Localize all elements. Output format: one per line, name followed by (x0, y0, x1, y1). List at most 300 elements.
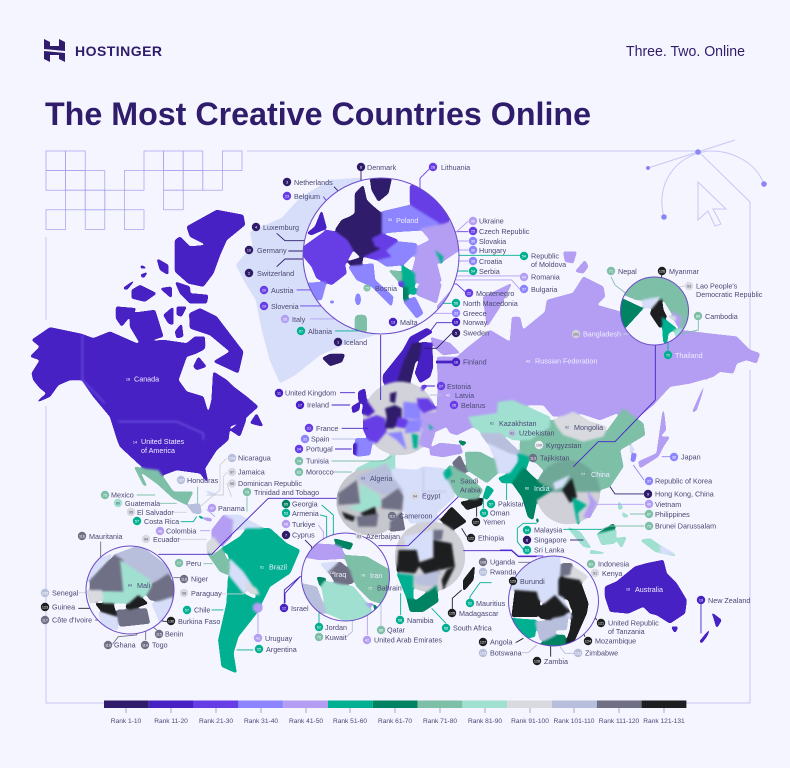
label: Jordan: Jordan (325, 623, 347, 632)
label: Ecuador (142, 535, 180, 544)
label: Malaysia: 64 (525, 528, 529, 532)
label: Germany (245, 246, 287, 255)
label: Tunisia (295, 456, 329, 466)
label: Angola (479, 638, 512, 646)
label: Nepal (607, 267, 637, 276)
label: New Zealand: 19 (699, 598, 703, 602)
label: Canada: Canada (134, 374, 159, 384)
label: Egypt: 94 (413, 494, 417, 498)
label: Croatia: 38 (471, 259, 475, 263)
label: Philippines: Philippines (655, 510, 690, 519)
label: Portugal (295, 444, 333, 454)
label: Benin (155, 630, 183, 638)
label: Zambia: Zambia (544, 657, 568, 666)
label: Belarus (450, 401, 486, 410)
label: Togo (141, 640, 168, 650)
label: Singapore: 8 (526, 538, 528, 542)
label: Brazil: 51 (260, 565, 264, 569)
label: France: 21 (307, 426, 311, 430)
label: South Africa: South Africa (453, 624, 492, 632)
label: Luxemburg: 4 (255, 225, 257, 229)
label: Bangladesh: Bangladesh (583, 330, 621, 338)
label: Republic of Korea: Republic of Korea (655, 476, 712, 486)
label: Estonia: 27 (439, 384, 443, 388)
label: Mauritania: Mauritania (89, 532, 123, 541)
label: Honduras: 107 (178, 478, 184, 482)
label: Qatar: Qatar (387, 626, 406, 634)
inset circle: Europe (300, 178, 460, 334)
legend: Rank 31-40 (244, 718, 278, 725)
legend: Rank 21-30 (199, 718, 233, 725)
label: Lao People's Democratic Republic (685, 282, 763, 299)
label: China: 77 (581, 472, 585, 476)
label: Norway: Norway (463, 318, 488, 327)
leader lines (78, 168, 701, 657)
label: Iceland (334, 338, 367, 347)
legend: Rank 81-90 (468, 718, 502, 725)
label: Republic of Moldova: Republic (531, 252, 559, 260)
label: Argentina: 55 (257, 647, 261, 651)
label: Bosnia: 75 (365, 286, 369, 290)
label: Chile: Chile (194, 606, 210, 614)
label: Sweden (452, 328, 489, 338)
label: Sri Lanka: Sri Lanka (534, 546, 564, 554)
label: Jamaica: Jamaica (238, 468, 265, 476)
label: Bulgaria: 37 (522, 287, 526, 291)
label: Cameroon: 112 (389, 514, 395, 518)
label: Greece: 33 (454, 311, 458, 315)
label: Iceland: Iceland (344, 338, 367, 347)
label: Egypt (411, 492, 440, 500)
label: Denmark: 6 (360, 165, 362, 169)
label: Croatia: Croatia (479, 257, 502, 266)
label: Iceland: 1 (337, 340, 339, 344)
label: Kyrgyzstan: 100 (536, 443, 542, 447)
label: Qatar: 88 (379, 628, 383, 632)
label: Uganda: Uganda (490, 558, 515, 566)
label: Lithuania (429, 163, 470, 172)
label: Kuwait: Kuwait (325, 633, 347, 642)
label: South Africa: 58 (444, 626, 448, 630)
label: Zambia: 128 (534, 659, 540, 663)
label: Pakistan: Pakistan (498, 500, 526, 508)
label: Greece (452, 309, 487, 318)
label: United Arab Emirates: United Arab Emirates (374, 636, 442, 644)
label: China (581, 470, 610, 479)
label: Kuwait: 76 (317, 635, 321, 639)
label: Mali: Mali (137, 581, 151, 590)
label: Nepal: Nepal (618, 267, 637, 276)
label: Malaysia: Malaysia (534, 526, 562, 534)
label: Peru (175, 559, 201, 568)
legend: Rank 111-120 (599, 718, 640, 725)
map: Europe mainland (352, 382, 447, 455)
label: Hungary: Hungary (479, 246, 507, 255)
label: Sweden: Sweden (463, 328, 489, 338)
label: Turkiye (282, 520, 315, 529)
label: Finland: Finland (463, 358, 487, 366)
label: Mali (128, 581, 151, 590)
map: Greenland (236, 178, 400, 383)
label: Ecuador: Ecuador (153, 535, 180, 544)
label: Lao People's Democratic Republic: Democratic Republic (696, 290, 763, 299)
label: Slovakia: 36 (471, 239, 475, 243)
legend: Rank 71-80 (423, 718, 457, 725)
label: United Republic of Tanzania (597, 618, 659, 636)
label: Trinidad and Tobago: Trinidad and Tobago (254, 488, 319, 497)
map: Central Asia, Middle East and India (430, 400, 600, 530)
label: Austria: Austria (271, 286, 293, 295)
label: Argentina: Argentina (266, 645, 297, 654)
title: The Most Creative Countries Online (45, 96, 591, 132)
label: Guatemala: 80 (116, 501, 120, 505)
label: Republic of Moldova (520, 252, 566, 269)
label: Luxemburg: Luxemburg (263, 223, 299, 232)
label: Montenegro: 22 (467, 291, 471, 295)
label: Niger: Niger (191, 574, 209, 584)
label: Singapore: Singapore (534, 536, 567, 544)
label: Sweden: 5 (455, 331, 457, 335)
label: Italy (281, 315, 306, 324)
label: Burkina Faso: 130 (168, 619, 174, 623)
label: Canada: 18 (126, 377, 130, 381)
label: Ghana: 119 (105, 643, 111, 647)
label: Colombia: Colombia (166, 526, 196, 536)
logo: Hostinger: HOSTINGER (75, 43, 162, 59)
label: Bahrain: Bahrain (377, 584, 402, 592)
label: Jordan (315, 623, 347, 632)
label: Tunisia: Tunisia (306, 456, 329, 466)
label: United Kingdom: 11 (277, 391, 281, 395)
label: Lithuania: 28 (431, 165, 435, 169)
label: Poland: 34 (388, 218, 392, 222)
label: Belgium: Belgium (294, 192, 320, 201)
map: Africa (337, 438, 475, 612)
label: United Republic of Tanzania: of Tanzania (608, 627, 645, 636)
inset circle: Middle East (300, 533, 390, 623)
label: Madagascar: Madagascar (459, 609, 499, 618)
label: Saudi Arabia: Arabia (460, 486, 481, 494)
label: Philippines: 87 (647, 512, 651, 516)
label: Bahrain: 72 (368, 586, 372, 590)
label: Azerbaijan: Azerbaijan (366, 532, 400, 541)
label: Tajikistan: Tajikistan (540, 454, 570, 462)
label: Poland: Poland (396, 216, 418, 225)
label: Costa Rica: 57 (135, 519, 139, 523)
label: Latvia (444, 391, 474, 400)
label: Spain (301, 434, 329, 444)
label: Saudi Arabia (451, 476, 481, 494)
label: Brazil (260, 562, 287, 572)
label: Honduras: Honduras (187, 476, 219, 485)
map: Indonesia, Australia, New Zealand (567, 500, 722, 643)
label: Italy: Italy (292, 315, 306, 324)
label: Iran: Iran (370, 571, 382, 580)
label: Austria: 20 (262, 288, 266, 292)
label: Yemen: Yemen (483, 518, 505, 526)
label: Israel: Israel (291, 604, 309, 613)
label: Portugal: 24 (297, 447, 301, 451)
label: Myanmar: 126 (659, 269, 665, 273)
label: Australia: 16 (626, 587, 630, 591)
label: Hungary: 39 (471, 248, 475, 252)
label: Guinea: 123 (42, 605, 48, 609)
label: France (305, 424, 338, 433)
label: Spain: 32 (303, 437, 307, 441)
label: Belgium (283, 192, 320, 201)
label: Bulgaria (520, 285, 557, 294)
label: Australia: Australia (635, 585, 663, 594)
label: Morocco: 83 (297, 470, 301, 474)
label: Mexico: 75 (103, 493, 107, 497)
label: United States of America: of America (141, 446, 175, 455)
label: Mozambique: 124 (585, 639, 591, 643)
legend: Rank 41-50 (289, 718, 323, 725)
label: Vietnam: 49 (647, 502, 651, 506)
label: Panama: 47 (210, 506, 214, 510)
label: Ukraine: 46 (471, 219, 475, 223)
label: Croatia (469, 257, 502, 266)
label: Togo: Togo (152, 640, 168, 650)
label: Nepal: 71 (609, 269, 613, 273)
label: Botswana: Botswana (490, 648, 522, 658)
label: Spain: Spain (311, 434, 329, 444)
label: Malta (389, 318, 418, 327)
label: Italy: 35 (283, 317, 287, 321)
label: Montenegro: Montenegro (476, 289, 514, 298)
label: Cambodia: 88 (696, 314, 700, 318)
label: Kazakhstan: Kazakhstan (499, 419, 537, 428)
label: Yemen: 127 (473, 520, 479, 524)
label: Oman (480, 508, 510, 518)
label: Bulgaria: Bulgaria (531, 285, 557, 294)
legend: Rank 101-110 (554, 718, 595, 725)
label: Namibia (396, 616, 433, 625)
label: Brazil: Brazil (269, 562, 287, 572)
label: Russian Federation: 43 (526, 359, 530, 363)
label: Sri Lanka: 63 (525, 548, 529, 552)
label: Israel (280, 604, 309, 613)
label: Guatemala: Guatemala (125, 499, 160, 508)
label: Belgium: 23 (285, 194, 289, 198)
label: Belarus: 26 (452, 403, 456, 407)
label: Iraq: Iraq (334, 570, 346, 579)
label: Nicaragua: Nicaragua (238, 454, 271, 462)
label: Finland: 16 (454, 360, 458, 364)
label: Armenia: Armenia (292, 509, 319, 518)
inset circle: East Africa (507, 555, 598, 648)
label: Uruguay: Uruguay (265, 634, 293, 643)
label: Greece: Greece (463, 309, 487, 318)
label: Cameroon: Cameroon (399, 512, 433, 520)
label: Republic of Moldova: of Moldova (531, 260, 566, 269)
label: Côte d'Ivoire: Côte d'Ivoire (52, 616, 92, 624)
label: Romania: 44 (522, 275, 526, 279)
label: Zambia (533, 657, 568, 666)
label: Namibia: 58 (398, 618, 402, 622)
label: Mongolia: Mongolia (574, 423, 603, 432)
label: Denmark: Denmark (367, 163, 397, 172)
label: Albania (297, 327, 332, 336)
label: Cambodia: Cambodia (705, 312, 738, 321)
label: Hong Kong, China: Hong Kong, China (655, 490, 714, 498)
label: Burundi: 129 (510, 579, 516, 583)
label: Colombia: 48 (158, 529, 162, 533)
label: Dominican Republic: Dominican Republic (238, 479, 302, 488)
label: Togo: 114 (142, 643, 148, 647)
label: Portugal: Portugal (306, 444, 333, 454)
label: Republic of Moldova: 54 (522, 254, 526, 258)
label: Senegal: Senegal (52, 588, 79, 598)
label: Algeria: Algeria (370, 474, 392, 483)
label: Turkiye: 45 (284, 522, 288, 526)
label: India (525, 484, 550, 493)
label: Georgia: Georgia (292, 500, 318, 508)
label: Benin: 115 (156, 632, 162, 636)
label: Japan: Japan (681, 452, 701, 462)
legend: Rank 121-131 (643, 718, 685, 725)
label: Qatar (377, 626, 406, 634)
label: Indonesia: Indonesia (598, 560, 629, 568)
label: Uganda (479, 558, 515, 566)
label: Kenya: Kenya (602, 569, 622, 578)
label: Mozambique: Mozambique (595, 636, 636, 646)
label: Iran (361, 571, 382, 580)
label: Brunei Darussalam: Brunei Darussalam (655, 522, 716, 530)
label: Ireland: 17 (298, 403, 302, 407)
label: Bosnia: Bosnia (375, 284, 397, 293)
label: North Macedonia: 56 (454, 301, 458, 305)
label: Mexico (101, 490, 134, 500)
label: Ecuador: 94 (144, 537, 148, 541)
label: Dominican Republic: 95 (230, 482, 234, 486)
label: El Salvador: El Salvador (137, 508, 174, 517)
label: Guinea (41, 602, 75, 612)
label: Egypt: Egypt (422, 492, 440, 500)
label: Uzbekistan: 91 (510, 431, 514, 435)
label: Romania: Romania (531, 272, 560, 282)
label: Switzerland: 2 (248, 271, 250, 275)
label: Serbia: Serbia (479, 267, 500, 276)
label: Senegal (41, 588, 79, 598)
label: Paraguay: Paraguay (191, 589, 222, 598)
label: Russian Federation: Russian Federation (535, 356, 597, 366)
label: Guinea: Guinea (52, 602, 75, 612)
legend: Rank 11-20 (154, 718, 188, 725)
legend (104, 700, 686, 725)
legend: Rank 1-10 (111, 718, 142, 725)
label: Republic of Korea: 37 (647, 479, 651, 483)
label: Oman: Oman (490, 508, 510, 518)
inset circle: West Africa (85, 545, 177, 634)
label: Paraguay: 98 (182, 591, 186, 595)
label: Ghana (104, 640, 136, 650)
label: Turkiye: Turkiye (292, 520, 315, 529)
label: United States of America (133, 437, 185, 455)
label: Germany: 10 (247, 248, 251, 252)
label: Chile: 57 (185, 608, 189, 612)
label: Zimbabwe: Zimbabwe (585, 648, 618, 658)
label: Côte d'Ivoire: 117 (42, 618, 48, 622)
label: Estonia (437, 382, 471, 391)
label: Peru: Peru (186, 559, 201, 568)
label: Slovakia: Slovakia (479, 237, 506, 246)
label: United States of America: 14 (133, 440, 137, 444)
label: Burkina Faso: Burkina Faso (178, 617, 220, 626)
legend: Rank 91-100 (511, 718, 549, 725)
label: Austria (260, 286, 293, 295)
label: Norway (452, 318, 488, 327)
label: Mongolia: 92 (565, 425, 569, 429)
label: Latvia: 42 (446, 393, 450, 397)
legend: Rank 51-60 (333, 718, 367, 725)
logo: Hostinger (44, 39, 162, 62)
label: Saudi Arabia: 69 (451, 479, 455, 483)
legend: Rank 61-70 (378, 718, 412, 725)
label: Rwanda: Rwanda (490, 568, 516, 576)
label: Namibia: Namibia (407, 616, 433, 625)
label: Ethiopia: Ethiopia (478, 534, 504, 542)
label: Uruguay: 41 (256, 636, 260, 640)
label: Brunei Darussalam: 73 (647, 524, 651, 528)
label: United States of America: United States (141, 437, 185, 446)
label: Kenya (591, 569, 622, 578)
label: Thailand (664, 351, 703, 360)
label: Japan (670, 452, 701, 462)
label: Slovenia: 29 (262, 304, 266, 308)
label: Niger (180, 574, 209, 584)
label: Bahrain (366, 584, 402, 592)
label: Kuwait (315, 633, 347, 642)
label: Czech Republic: 25 (471, 229, 475, 233)
inset circle: South East Asia (618, 273, 692, 345)
label: Serbia (469, 267, 500, 276)
label: Czech Republic: Czech Republic (479, 227, 530, 236)
label: Ghana: Ghana (114, 640, 136, 650)
label: New Zealand: New Zealand (708, 596, 750, 605)
label: Belarus: Belarus (461, 401, 486, 410)
label: Panama: Panama (218, 504, 245, 513)
label: Benin: Benin (165, 630, 183, 638)
label: Myanmar: Myanmar (669, 267, 700, 276)
label: Ethiopia (467, 534, 504, 542)
label: Iran: 78 (361, 573, 365, 577)
label: Finland (452, 358, 487, 366)
label: Norway: 15 (454, 320, 458, 324)
label: United Republic of Tanzania: United Republic (608, 618, 659, 628)
label: Burundi: Burundi (520, 577, 545, 586)
label: Mexico: Mexico (111, 490, 134, 500)
label: Chile (183, 606, 210, 614)
label: El Salvador: 95 (129, 510, 133, 514)
label: Ethiopia: 122 (468, 536, 474, 540)
label: Tajikistan: 113 (530, 456, 536, 460)
label: Kyrgyzstan: Kyrgyzstan (546, 441, 582, 450)
label: Bangladesh: 101 (573, 332, 579, 336)
label: Ireland (296, 400, 329, 410)
map: Scandinavia (383, 328, 433, 398)
label: India: India (534, 484, 550, 493)
label: Israel: 12 (282, 606, 286, 610)
label: United Republic of Tanzania: 121 (598, 621, 604, 625)
label: Mauritania: 116 (79, 534, 85, 538)
label: Zimbabwe: 103 (575, 651, 581, 655)
label: Azerbaijan: 93 (357, 534, 361, 538)
label: Malta: Malta (400, 318, 418, 327)
label: Uganda: 108 (480, 560, 486, 564)
label: Estonia: Estonia (447, 382, 471, 391)
label: Mali: 84 (128, 583, 132, 587)
